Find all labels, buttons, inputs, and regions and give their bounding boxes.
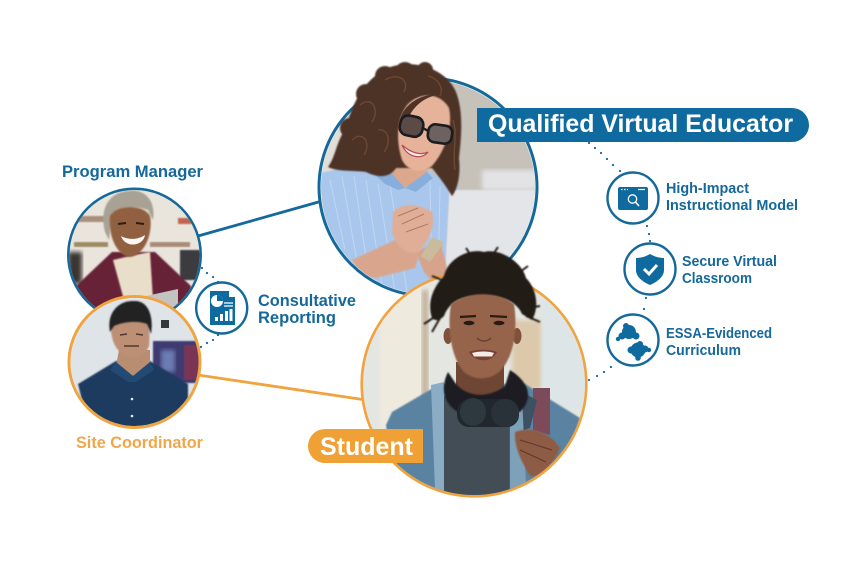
icon: essa-evidenced curriculum	[608, 314, 658, 366]
connector: student to site coordinator	[198, 375, 366, 400]
text: consultative reporting: Consultative	[258, 292, 356, 310]
photo: student	[360, 247, 592, 500]
text: essa-evidenced curriculum	[666, 326, 772, 359]
label: qualified virtual educator: Qualified Virtual Educator	[488, 110, 793, 138]
text: high-impact instructional model: High-Impact	[666, 181, 749, 197]
icon: secure virtual classroom	[624, 244, 676, 294]
text: essa-evidenced curriculum: Curriculum	[666, 343, 741, 359]
heading: site coordinator: Site Coordinator	[76, 434, 204, 452]
label: student: Student	[320, 433, 414, 461]
text: secure virtual classroom: Classroom	[682, 271, 752, 287]
text: high-impact instructional model: Instructional Model	[666, 198, 798, 214]
text: essa-evidenced curriculum: ESSA-Evidenced	[666, 326, 772, 342]
icon: high-impact instructional model	[608, 172, 658, 224]
hair: curly afro	[424, 247, 540, 332]
photo: qualified virtual educator	[318, 62, 540, 300]
text: secure virtual classroom	[682, 254, 777, 287]
face	[398, 95, 450, 171]
icon: consultative reporting	[196, 282, 247, 334]
dotted connector: managers to consultative reporting	[200, 267, 219, 348]
heading: program manager: Program Manager	[62, 163, 204, 181]
text: high-impact instructional model	[666, 181, 798, 214]
label: student	[308, 429, 423, 463]
photo: site coordinator	[66, 296, 204, 430]
connector: educator to program manager	[198, 201, 322, 236]
text: consultative reporting	[258, 292, 356, 327]
dotted connector: educator to services	[588, 142, 651, 381]
hair: curly mass	[328, 62, 461, 196]
photo: program manager	[67, 188, 202, 309]
text: secure virtual classroom: Secure Virtual	[682, 254, 777, 270]
text: consultative reporting: Reporting	[258, 309, 336, 327]
